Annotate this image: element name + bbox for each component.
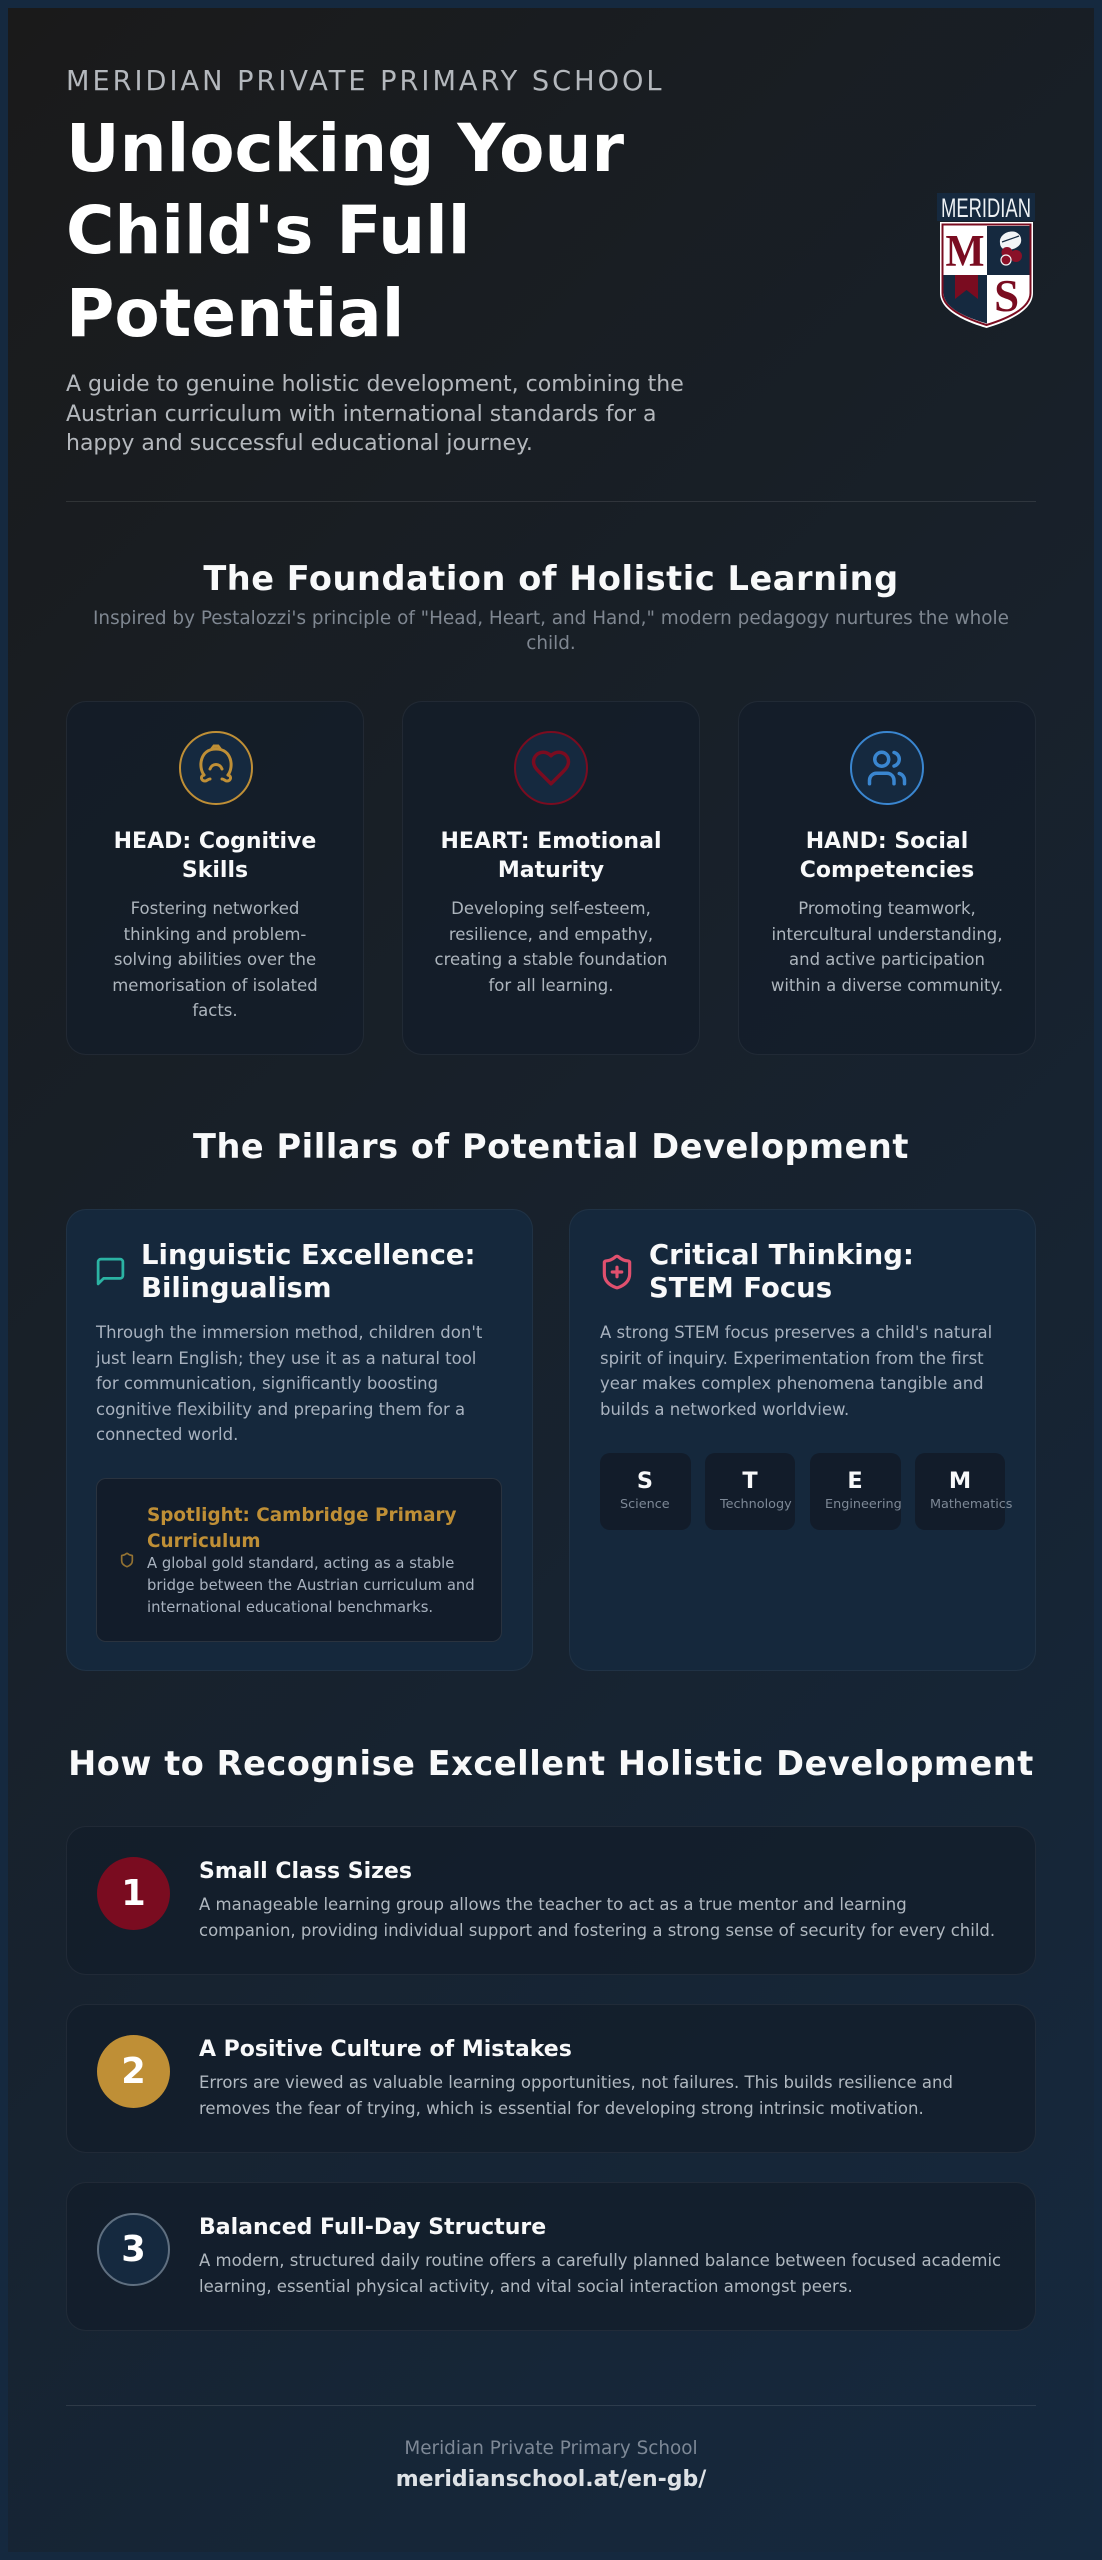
card title	[800, 829, 974, 883]
card title	[441, 829, 661, 883]
number badge 3	[97, 2213, 170, 2286]
step title: A Positive Culture of Mistakes	[199, 2037, 572, 2062]
card text: facts.	[192, 1001, 238, 1020]
number badge 2: 2	[121, 2051, 146, 2092]
foundation intro text	[93, 608, 1009, 654]
pillar text	[600, 1323, 992, 1419]
stem tile: technology	[705, 1453, 795, 1530]
pillar text: for communication, significantly boosting	[96, 1374, 438, 1393]
subtitle: happy and successful educational journey.	[66, 431, 533, 456]
stem tile: mathematics	[915, 1453, 1005, 1530]
footer url: meridianschool.at/en-gb/	[396, 2467, 706, 2492]
step title: Small Class Sizes	[199, 1859, 412, 1884]
logo: Meridian shield crest	[937, 193, 1035, 328]
card title: HEAD: Cognitive	[114, 829, 316, 854]
icon: shield plus	[602, 1254, 632, 1290]
header divider	[66, 501, 1036, 502]
subtitle: Austrian curriculum with international standards for a	[66, 402, 656, 426]
pillar heading: Bilingualism	[141, 1272, 332, 1304]
card text: intercultural understanding,	[771, 925, 1003, 944]
step text	[199, 2251, 1001, 2296]
stem tile: engineering	[810, 1453, 901, 1530]
pillar text: cognitive flexibility and preparing them for a	[96, 1400, 465, 1419]
pillar heading: Linguistic Excellence:	[141, 1239, 476, 1271]
icon: heart	[514, 731, 588, 805]
heading: foundation: The Foundation of Holistic Learning	[203, 559, 899, 598]
number badge 2	[97, 2035, 170, 2108]
panel: linguistic excellence	[66, 1209, 533, 1671]
step text: learning, essential physical activity, and vital social interaction amongst peers.	[199, 2277, 853, 2296]
pillar text: just learn English; they use it as a natural tool	[96, 1349, 476, 1368]
spotlight text: international educational benchmarks.	[147, 1599, 433, 1616]
footer school name: Meridian Private Primary School	[404, 2438, 698, 2459]
card text: Fostering networked	[131, 899, 299, 918]
title: Child's Full	[66, 192, 470, 269]
step text: companion, providing individual support and fostering a strong sense of security for every child.	[199, 1921, 995, 1940]
spotlight title	[147, 1505, 457, 1552]
school eyebrow: MERIDIAN PRIVATE PRIMARY SCHOOL	[66, 66, 665, 97]
card text	[434, 899, 667, 995]
card text: solving abilities over the	[114, 950, 316, 969]
letter: S	[637, 1468, 653, 1494]
step text: Errors are viewed as valuable learning opportunities, not failures. This builds resilience and	[199, 2073, 953, 2092]
pillar text: spirit of inquiry. Experimentation from the first	[600, 1349, 984, 1368]
icon: speech bubble	[96, 1258, 124, 1286]
foundation intro text: Inspired by Pestalozzi's principle of "Head, Heart, and Hand," modern pedagogy nurtures the whole	[93, 608, 1009, 629]
card title: Maturity	[498, 858, 604, 883]
panel: heart	[402, 701, 700, 1055]
letter: E	[847, 1468, 863, 1494]
icon: people	[850, 731, 924, 805]
card title	[114, 829, 316, 883]
card title: HEART: Emotional	[441, 829, 661, 854]
subtitle: A guide to genuine holistic development, combining the	[66, 372, 684, 397]
panel: step 1	[66, 1826, 1036, 1975]
title	[66, 110, 624, 352]
number badge 1: 1	[121, 1873, 146, 1914]
step text	[199, 2073, 953, 2118]
pillar text: builds a networked worldview.	[600, 1400, 849, 1419]
step text	[199, 1895, 995, 1940]
stem tile: science	[600, 1453, 691, 1530]
step text: removes the fear of trying, which is essential for developing strong intrinsic motivation.	[199, 2099, 924, 2118]
pillar heading	[649, 1239, 914, 1304]
spotlight text	[147, 1555, 475, 1616]
panel: critical thinking	[569, 1209, 1036, 1671]
card title: Skills	[182, 858, 248, 883]
number badge 3: 3	[121, 2229, 146, 2270]
label: Engineering	[825, 1497, 902, 1512]
spotlight text: A global gold standard, acting as a stable	[147, 1555, 454, 1572]
logo: Meridian shield crest: M	[946, 226, 984, 276]
panel: step 3	[66, 2182, 1036, 2331]
card text: resilience, and empathy,	[449, 925, 653, 944]
step title: Balanced Full-Day Structure	[199, 2215, 546, 2240]
label: Science	[620, 1497, 670, 1512]
step text: A modern, structured daily routine offers a carefully planned balance between focused academic	[199, 2251, 1001, 2270]
letter: T	[742, 1468, 758, 1494]
subtitle	[66, 372, 684, 456]
card text: memorisation of isolated	[112, 976, 318, 995]
spotlight title: Spotlight: Cambridge Primary	[147, 1505, 457, 1526]
label: Technology	[720, 1497, 792, 1512]
heading: pillars: The Pillars of Potential Development	[193, 1127, 909, 1166]
pillar text: A strong STEM focus preserves a child's natural	[600, 1323, 992, 1342]
pillar heading	[141, 1239, 476, 1304]
spotlight title: Curriculum	[147, 1531, 261, 1552]
card text: Developing self-esteem,	[451, 899, 651, 918]
foundation intro text: child.	[526, 633, 576, 654]
card text: Promoting teamwork,	[798, 899, 976, 918]
callout: Cambridge spotlight	[96, 1478, 502, 1642]
footer divider	[66, 2405, 1036, 2406]
panel: head	[66, 701, 364, 1055]
card text: thinking and problem-	[124, 925, 306, 944]
heading: recognise: How to Recognise Excellent Holistic Development	[68, 1744, 1034, 1783]
card text: creating a stable foundation	[434, 950, 667, 969]
logo: Meridian shield crest: S	[994, 271, 1019, 321]
pillar text: connected world.	[96, 1425, 238, 1444]
card title: HAND: Social	[806, 829, 968, 854]
pillar text: year makes complex phenomena tangible and	[600, 1374, 984, 1393]
step text: A manageable learning group allows the teacher to act as a true mentor and learning	[199, 1895, 907, 1914]
label: Mathematics	[930, 1497, 1012, 1512]
pillar heading: STEM Focus	[649, 1272, 832, 1304]
icon: small shield	[120, 1552, 134, 1568]
card title: Competencies	[800, 858, 974, 883]
card text: for all learning.	[488, 976, 614, 995]
logo: Meridian shield crest: MERIDIAN	[941, 193, 1031, 223]
number badge 1	[97, 1857, 170, 1930]
pillar text	[96, 1323, 482, 1444]
title: Potential	[66, 274, 404, 352]
pillar text: Through the immersion method, children don't	[96, 1323, 482, 1342]
icon: head	[179, 731, 253, 805]
title: Unlocking Your	[66, 110, 624, 186]
card text: within a diverse community.	[771, 976, 1003, 995]
card text: and active participation	[789, 950, 985, 969]
spotlight text: bridge between the Austrian curriculum and	[147, 1577, 475, 1594]
letter: M	[949, 1468, 971, 1494]
card text	[771, 899, 1003, 995]
panel: hand	[738, 701, 1036, 1055]
pillar heading: Critical Thinking:	[649, 1239, 914, 1271]
panel: step 2	[66, 2004, 1036, 2153]
card text	[112, 899, 318, 1020]
